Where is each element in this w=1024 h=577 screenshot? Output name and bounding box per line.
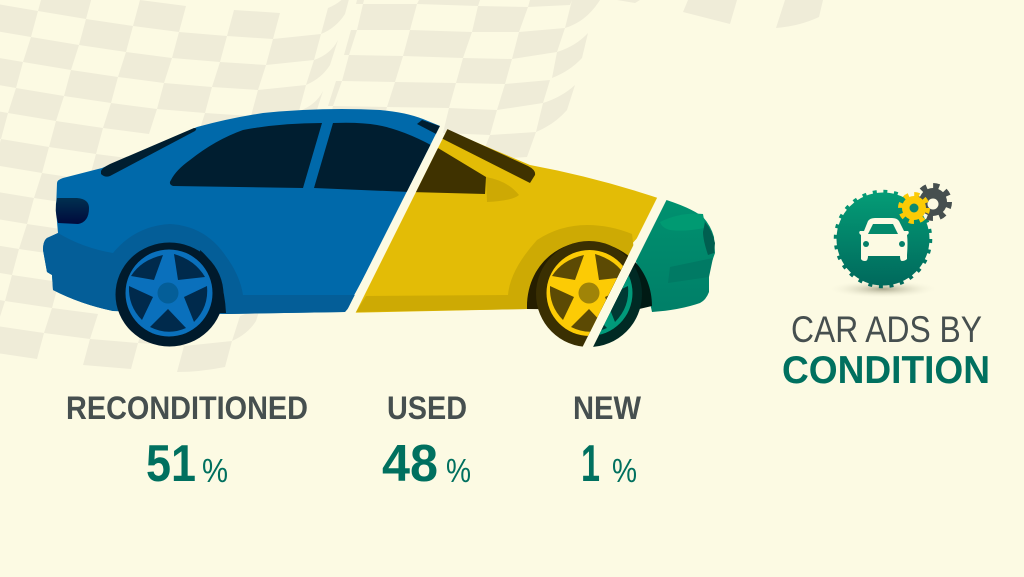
hood highlight — [660, 214, 704, 231]
value: 51 — [146, 435, 196, 493]
title line 1: CAR ADS BY — [791, 309, 982, 350]
front tyre — [536, 241, 628, 347]
percent sign: % — [202, 452, 228, 489]
value: 1 — [581, 435, 600, 493]
front side window — [314, 123, 440, 192]
front rim openings — [550, 254, 628, 332]
rear rim — [126, 250, 212, 336]
blue lower bumper and arch flare — [43, 224, 360, 314]
green car body — [636, 200, 715, 312]
blue car body — [43, 109, 445, 314]
title — [782, 309, 990, 392]
label: NEW — [573, 390, 642, 426]
windshield — [441, 128, 535, 183]
icon: grey gear — [917, 186, 949, 218]
percent sign: % — [446, 452, 471, 489]
front hub — [578, 282, 600, 304]
car section: reconditioned (blue) — [43, 109, 445, 346]
side window — [410, 148, 486, 194]
tail light — [56, 198, 89, 224]
front wheel arch — [612, 262, 652, 310]
car illustration — [43, 109, 715, 347]
windshield sliver — [417, 120, 440, 134]
front rim — [546, 250, 623, 336]
rim openings — [602, 286, 628, 330]
rear side window — [170, 123, 322, 188]
front vent — [668, 258, 713, 283]
value: 48 — [382, 435, 438, 493]
stat: reconditioned — [66, 390, 308, 493]
badge teeth — [836, 192, 930, 286]
car section: new (green) — [593, 200, 715, 347]
rear wheel arch — [200, 250, 226, 313]
rear rim openings — [129, 254, 207, 332]
tyre — [593, 266, 642, 347]
title line 2: CONDITION — [782, 349, 990, 392]
icon: yellow gear — [900, 194, 928, 222]
headlight — [703, 222, 715, 255]
yellow lower sill and arch flare — [356, 225, 640, 312]
rear hub — [158, 282, 178, 304]
rear tyre — [116, 242, 224, 346]
rim — [599, 275, 632, 335]
label: USED — [387, 390, 467, 426]
checkered flag background — [0, 0, 823, 372]
badge shadow — [827, 280, 939, 298]
label: RECONDITIONED — [66, 390, 308, 426]
icon: car front — [859, 218, 909, 261]
stat: used — [382, 390, 471, 493]
front wheel arch — [526, 244, 628, 310]
rear spoiler window strip — [101, 128, 196, 177]
side mirror — [486, 177, 519, 202]
percent sign: % — [612, 452, 637, 489]
stat: new — [573, 390, 642, 493]
icon: car badge with gears — [827, 186, 949, 298]
yellow car body — [340, 127, 670, 313]
car section: used (yellow) — [340, 127, 670, 347]
badge disc — [836, 192, 930, 286]
